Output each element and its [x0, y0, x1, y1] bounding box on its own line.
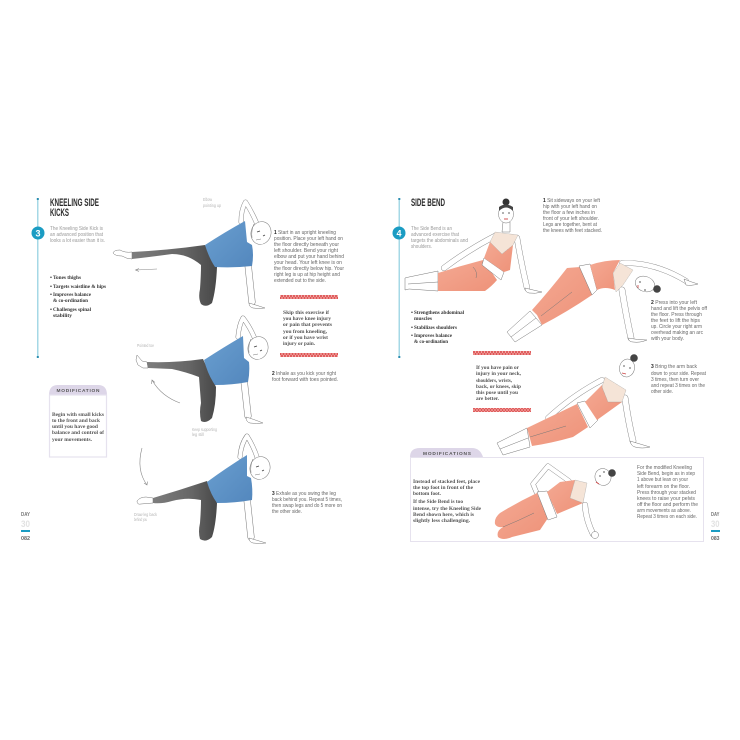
right page footer: 083	[711, 536, 720, 542]
caution: side bend: shoulders, wrists,	[476, 378, 513, 384]
panel: modifications: MODIFICATIONS	[423, 451, 472, 457]
modification notes right: Repeat 3 times on each side.	[637, 514, 697, 520]
label: keep supporting leg still: leg still	[192, 432, 204, 437]
benefits list: Kneeling Side Kicks: & co-ordination	[53, 298, 89, 304]
benefits list: Kneeling Side Kicks	[50, 275, 107, 319]
step 3 text: 3 Exhale as you swing the leg	[272, 491, 336, 497]
modification notes right: Side Bend, begin as in step	[637, 471, 695, 477]
intro text: Kneeling Side Kick	[50, 226, 105, 244]
modification notes left: Bend shown here, which is	[413, 512, 475, 518]
heading: Kneeling Side Kicks	[50, 197, 99, 219]
modification notes right: Press through your stacked	[637, 490, 696, 496]
arrow: kick forward	[152, 380, 180, 403]
step 1 text: right leg is up at hip height and	[274, 272, 340, 278]
right page accent rule	[398, 198, 400, 358]
intro text: Side Bend: The Side Bend is an	[411, 226, 452, 232]
benefits list: Kneeling Side Kicks: •	[50, 284, 52, 290]
intro text: Side Bend	[411, 226, 468, 250]
step 2 text: Side Bend	[650, 300, 707, 342]
panel: modification: to the front and back	[52, 418, 101, 424]
benefits list: Kneeling Side Kicks: •	[50, 275, 52, 281]
modification notes left: slightly less challenging.	[413, 518, 471, 524]
step 3 text: Side Bend: other side.	[651, 389, 673, 395]
benefits list: Kneeling Side Kicks: Tones thighs	[53, 275, 82, 281]
benefits list: Side Bend: •	[411, 325, 413, 331]
number badge 4	[392, 226, 406, 240]
caution: side bend: this pose until you	[476, 390, 518, 396]
panel: modification	[49, 385, 107, 457]
caution: kneeling side kicks: or if you have wrist	[283, 335, 328, 341]
right page footer: DAY	[711, 512, 720, 518]
left page footer	[21, 512, 31, 542]
benefits list: Side Bend	[411, 310, 464, 345]
number badge 3	[32, 226, 44, 240]
step 2 text: Side Bend: 2 Press into your left	[651, 300, 697, 306]
step 2 text: Side Bend: hand and lift the pelvis off	[651, 306, 707, 312]
caution: side bend: are better.	[476, 396, 500, 402]
number badge 4: 4	[396, 228, 402, 238]
caution: kneeling side kicks: injury or pain.	[283, 341, 316, 347]
step 2 text	[272, 371, 338, 383]
step 3 text: then swap legs and do 5 more on	[272, 503, 342, 509]
modification notes left: intense, try the Kneeling Side	[413, 506, 481, 512]
panel: modification: balance and control of	[52, 430, 104, 436]
label: keep supporting leg still	[192, 427, 217, 437]
modification notes left	[413, 479, 481, 524]
step 3 text	[272, 491, 342, 515]
label: draw leg back behind you: behind you	[134, 517, 147, 522]
modification notes right: 1 above but lean on your	[637, 477, 688, 483]
intro text: Kneeling Side Kick: an advanced position that	[50, 232, 103, 238]
step 1 text: Side Bend: hip with your left hand on	[543, 204, 597, 210]
benefits list: Side Bend: •	[411, 333, 413, 339]
step 1 text: the floor directly beneath your	[274, 242, 339, 248]
step 1 text: left shoulder. Bend your right	[274, 248, 338, 254]
step 2 text: Side Bend: the floor. Press through	[651, 312, 702, 318]
step 1 text: 1 Start in an upright kneeling	[274, 230, 336, 236]
illustration: kneeling side bend	[495, 466, 616, 539]
caution: side bend: If you have pain or	[476, 365, 519, 371]
label: draw leg back behind you	[134, 512, 158, 522]
left page footer: 082	[21, 536, 30, 542]
step 3 text: Side Bend: 3 Bring the arm back	[651, 364, 697, 370]
step 1 text: Side Bend: the floor a few inches in	[543, 210, 595, 216]
caution: kneeling side kicks: Skip this exercise if	[283, 310, 329, 316]
label: draw leg back behind you: Draw leg back	[134, 512, 158, 517]
benefits list: Side Bend: Stabilizes shoulders	[414, 325, 458, 331]
benefits list: Kneeling Side Kicks: Targets waistline & hips	[53, 284, 107, 290]
step 1 text: extended out to the side.	[274, 278, 326, 284]
panel: modification: MODIFICATION	[56, 388, 100, 394]
caution: kneeling side kicks: you from kneeling,	[283, 329, 328, 335]
modification notes right: off the floor and perform the	[637, 502, 698, 508]
step 3 text: Side Bend: 3 times, then turn over	[651, 377, 699, 383]
arrow: swing leg back	[140, 448, 148, 485]
caution: kneeling side kicks	[280, 295, 338, 357]
step 3 text: the other side.	[272, 509, 302, 515]
benefits list: Kneeling Side Kicks: Challenges spinal	[53, 307, 91, 313]
right page footer: 30	[711, 519, 720, 529]
illustration: kneeling side kick step 1	[113, 202, 274, 308]
modification notes left: the top foot in front of the	[413, 485, 474, 491]
step 1 text: Side Bend: Legs are together, bent at	[543, 222, 597, 228]
benefits list: Kneeling Side Kicks: •	[50, 307, 52, 313]
step 2 text: Side Bend: the feet to lift the hips	[651, 318, 700, 324]
step 1 text: Side Bend: 1 Sit sideways on your left	[543, 198, 600, 204]
modification notes right	[637, 465, 698, 520]
step 1 text: Side Bend: front of your left shoulder.	[543, 216, 599, 222]
left page footer: 30	[21, 519, 30, 529]
caution: kneeling side kicks: you have knee injury	[283, 316, 331, 322]
label: elbow pointing up	[203, 197, 221, 208]
caution: kneeling side kicks: or pain that prevents	[283, 322, 333, 328]
benefits list: Side Bend: •	[411, 310, 413, 316]
illustration: side bend step 3	[497, 354, 650, 455]
intro text: Kneeling Side Kick: The Kneeling Side Kick is	[50, 226, 103, 232]
benefits list: Side Bend: Strengthens abdominal	[414, 310, 464, 316]
step 3 text: Side Bend	[651, 364, 706, 395]
panel: modification: your movements.	[52, 437, 93, 443]
benefits list: Side Bend: & co-ordination	[414, 339, 449, 345]
step 1 text: Side Bend: the knees with feet stacked.	[543, 228, 602, 234]
caution: side bend: back, or knees, skip	[476, 384, 521, 390]
modification notes right: For the modified Kneeling	[637, 465, 692, 471]
step 2 text: foot forward with toes pointed.	[272, 377, 338, 383]
illustration: side bend step 2	[507, 260, 698, 342]
illustration: side bend step 1	[405, 198, 542, 293]
panel: modifications	[410, 448, 704, 542]
illustration: kneeling side kick step 3	[137, 436, 273, 544]
benefits list: Kneeling Side Kicks: Improves balance	[53, 292, 91, 298]
heading: Kneeling Side Kicks: KNEELING SIDE	[50, 197, 99, 209]
right page footer	[711, 512, 720, 542]
modification notes left: bottom foot.	[413, 491, 442, 497]
step 1 text: the floor directly below hip. Your	[274, 266, 344, 272]
label: elbow pointing up: Elbow	[203, 197, 212, 202]
intro text: Side Bend: targets the abdominals and	[411, 238, 468, 244]
left page accent rule	[37, 198, 39, 358]
panel: modification: until you have good	[52, 424, 99, 430]
step 1 text: position. Place your left hand on	[274, 236, 343, 242]
step 2 text: 2 Inhale as you kick your right	[272, 371, 336, 377]
step 3 text: back behind you. Repeat 5 times,	[272, 497, 342, 503]
modification notes left: If the Side Bend is too	[413, 499, 463, 505]
step 1 text	[274, 230, 344, 284]
heading: Kneeling Side Kicks: KICKS	[50, 207, 69, 219]
modification notes left: Instead of stacked feet, place	[413, 479, 481, 485]
caution: side bend	[473, 351, 531, 412]
caution: side bend: injury in your neck,	[476, 371, 522, 377]
step 1 text: elbow and put your hand behind	[274, 254, 344, 260]
modification notes right: knees to raise your pelvis	[637, 496, 695, 502]
step 1 text: your head. Your left knee is on	[274, 260, 342, 266]
panel: modification: Begin with small kicks	[52, 412, 105, 418]
intro text: Side Bend: shoulders.	[411, 244, 432, 250]
step 2 text: Side Bend: with your body.	[650, 336, 684, 342]
benefits list: Kneeling Side Kicks: stability	[53, 313, 72, 319]
label: pointed toe: Pointed toe	[137, 343, 154, 348]
step 3 text: Side Bend: and repeat 3 times on the	[651, 383, 705, 389]
arrow: leg extended	[136, 268, 157, 272]
benefits list: Side Bend: muscles	[414, 316, 433, 322]
illustration: kneeling side kick step 2	[136, 318, 271, 424]
heading: Side Bend: SIDE BEND	[411, 197, 445, 209]
modification notes right: left forearm on the floor.	[637, 484, 690, 490]
modification notes right: arm movements as above.	[637, 508, 691, 514]
number badge 3: 3	[35, 228, 41, 238]
benefits list: Side Bend: Improves balance	[414, 333, 452, 339]
step 1 text: Side Bend	[543, 198, 602, 234]
step 3 text: Side Bend: down to your side. Repeat	[651, 371, 706, 377]
intro text: Kneeling Side Kick: looks a lot easier than it is.	[50, 238, 105, 244]
benefits list: Kneeling Side Kicks: •	[50, 292, 52, 298]
label: elbow pointing up: pointing up	[203, 203, 221, 208]
intro text: Side Bend: advanced exercise that	[411, 232, 459, 238]
left page footer: DAY	[21, 512, 31, 518]
label: keep supporting leg still: Keep supporting	[192, 427, 217, 432]
step 2 text: Side Bend: overhead making an arc	[651, 330, 703, 336]
step 2 text: Side Bend: up. Circle your right arm	[651, 324, 702, 330]
